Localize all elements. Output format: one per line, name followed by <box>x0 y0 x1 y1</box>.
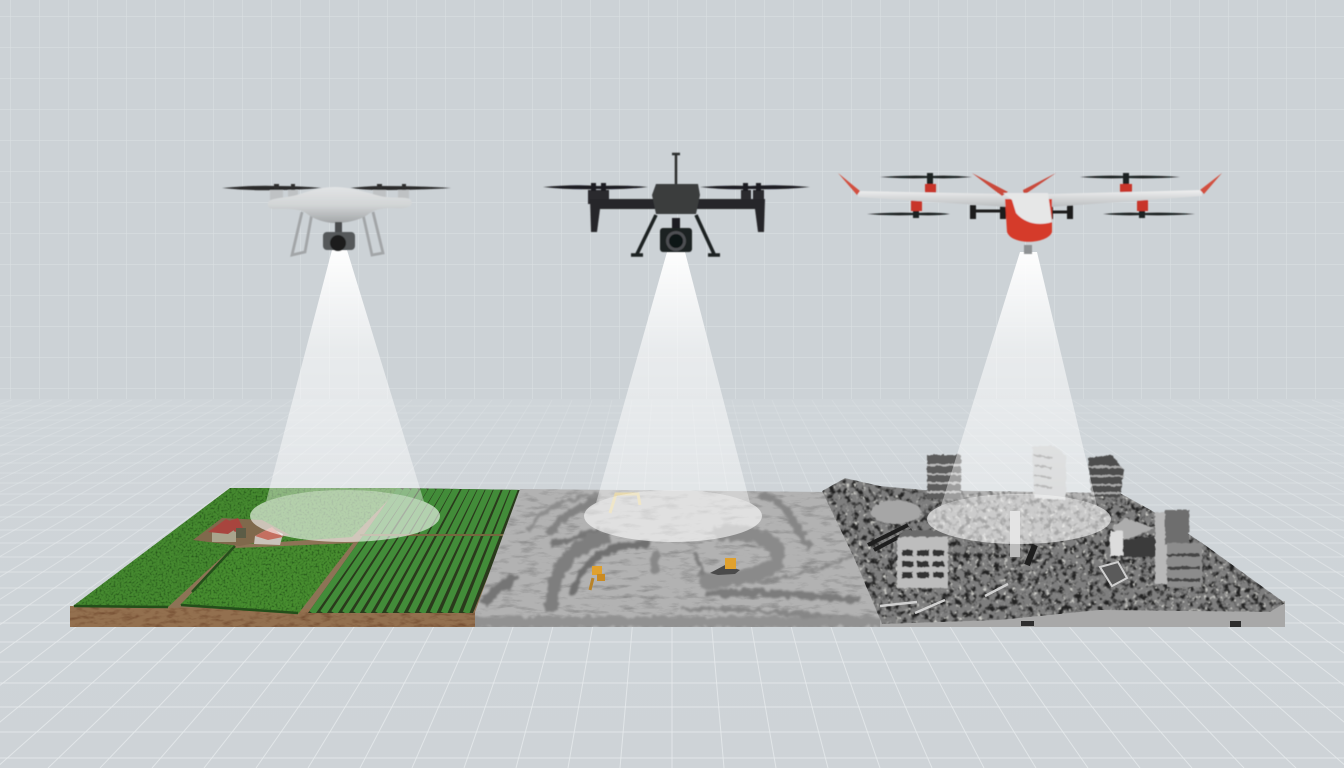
propellers <box>222 186 451 190</box>
scan footprint ellipse <box>584 490 762 542</box>
central broken column <box>1010 511 1020 557</box>
quarry excavator left <box>590 566 605 590</box>
rear standing tower <box>1032 446 1066 500</box>
drone: red and white fixed-wing VTOL <box>838 173 1222 254</box>
red winglets <box>838 173 1222 195</box>
scan footprint ellipse <box>927 494 1111 544</box>
propellers <box>867 176 1195 215</box>
quarry terraces <box>470 495 885 622</box>
light beam: drone two <box>584 252 762 542</box>
quarry excavator under beam <box>610 494 640 513</box>
antenna <box>672 153 680 184</box>
farm soil slab <box>70 606 476 627</box>
front landing legs <box>631 215 720 255</box>
wings <box>858 190 1202 207</box>
motors <box>588 190 764 204</box>
central body <box>652 184 700 214</box>
panel: quarry section <box>470 489 885 627</box>
camera gimbal <box>323 222 355 251</box>
rear ruin left <box>927 455 961 499</box>
fuselage white nose panel <box>1003 193 1052 224</box>
left crop field <box>73 488 400 607</box>
red V-tail <box>972 173 1056 196</box>
wall background with grid <box>0 0 1344 399</box>
fallen beams <box>880 584 1008 613</box>
propellers <box>543 185 810 189</box>
camera gimbal <box>660 218 692 252</box>
quarry ground and slab <box>475 489 882 627</box>
field front shadow edges <box>74 546 298 613</box>
collapsed black arch <box>868 525 912 550</box>
rubble field <box>822 478 1285 624</box>
camera mount <box>1024 245 1032 254</box>
light beam: drone three <box>927 252 1111 544</box>
landing gear <box>292 210 383 255</box>
middle crop field <box>180 543 353 614</box>
fuselage <box>1005 199 1052 242</box>
rear ruin right <box>1088 455 1124 497</box>
drone: white quadcopter <box>222 184 451 255</box>
arms and rear legs <box>590 199 765 232</box>
clearing around farmhouse <box>193 518 290 546</box>
farmhouse with red roof <box>208 518 246 542</box>
light beam: drone one <box>250 250 440 542</box>
dark gap under beam <box>1027 545 1035 565</box>
collapsed slab block <box>1110 518 1155 557</box>
front office ruin <box>897 530 948 588</box>
overturned concrete frame <box>1100 562 1127 586</box>
rubble slab <box>880 601 1285 627</box>
landing gear <box>970 205 1073 219</box>
crop rows field <box>308 488 523 613</box>
drone body <box>268 187 412 223</box>
debris mound <box>871 500 921 524</box>
floor with perspective grid <box>0 399 1344 768</box>
panel: farmland section <box>70 488 523 627</box>
panel: disaster rubble section <box>822 446 1285 627</box>
motor pods <box>911 173 1148 218</box>
terrain platform <box>70 446 1285 627</box>
motors <box>270 190 409 202</box>
farm ground <box>73 488 523 610</box>
drone: black quadcopter <box>543 153 810 255</box>
scan footprint ellipse <box>250 490 440 542</box>
right ruin tower <box>1155 510 1202 587</box>
farm barn <box>254 527 283 545</box>
quarry excavator right <box>710 558 740 575</box>
